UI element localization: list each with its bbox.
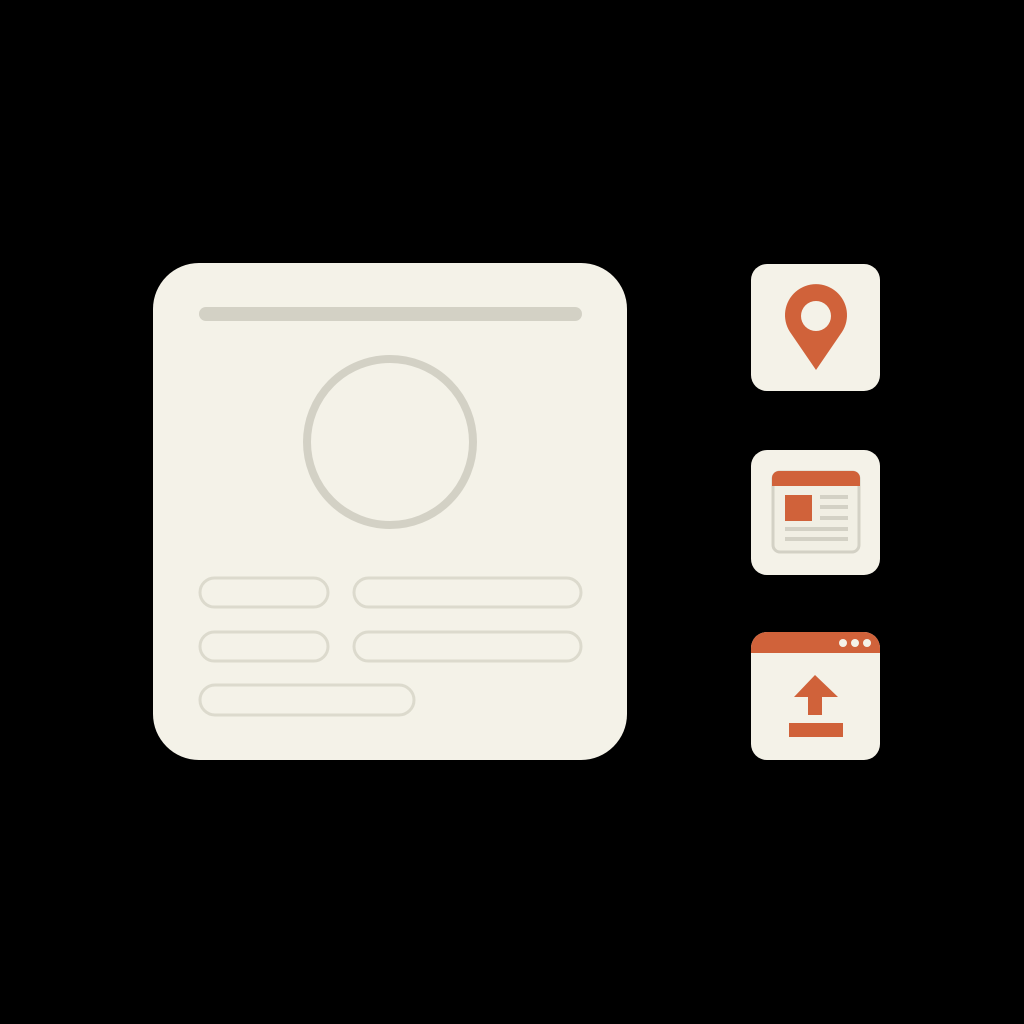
panel: main profile card — [153, 263, 627, 760]
icon: location pin tile — [751, 264, 880, 391]
top bar — [199, 307, 582, 321]
icon: upload window tile — [751, 632, 880, 760]
avatar circle — [307, 359, 473, 525]
icon: article/document tile — [751, 450, 880, 575]
field pills — [200, 578, 581, 715]
